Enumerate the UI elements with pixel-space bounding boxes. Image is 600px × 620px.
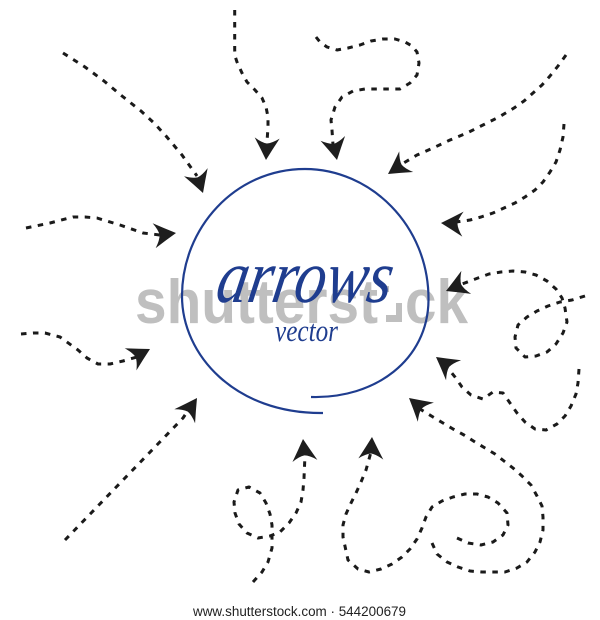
arrow: lower left long [65, 391, 207, 540]
title: arrows: arrows [211, 235, 401, 319]
arrow: top S curve [316, 37, 419, 162]
arrow: right loop [441, 271, 585, 357]
arrow: bottom loop [234, 438, 317, 582]
watermark: shutterst [135, 268, 378, 337]
arrow: upper left long [63, 53, 215, 197]
circle: blue open spiral [182, 169, 429, 413]
arrow: bottom right large curve [401, 388, 543, 572]
arrow: bottom spiral [343, 436, 508, 572]
arrow: lower left wavy [21, 333, 156, 370]
arrow: top left wavy [235, 10, 280, 161]
watermark: ck [405, 268, 468, 337]
footer text: www.shutterstock.com · 544200679 [192, 604, 406, 619]
arrow: left wavy [26, 217, 178, 248]
arrow: right curved [440, 124, 564, 237]
arrow: top right long [381, 55, 566, 184]
subtitle: vector: vector [275, 313, 339, 348]
arrow: lower right wavy [428, 347, 579, 430]
